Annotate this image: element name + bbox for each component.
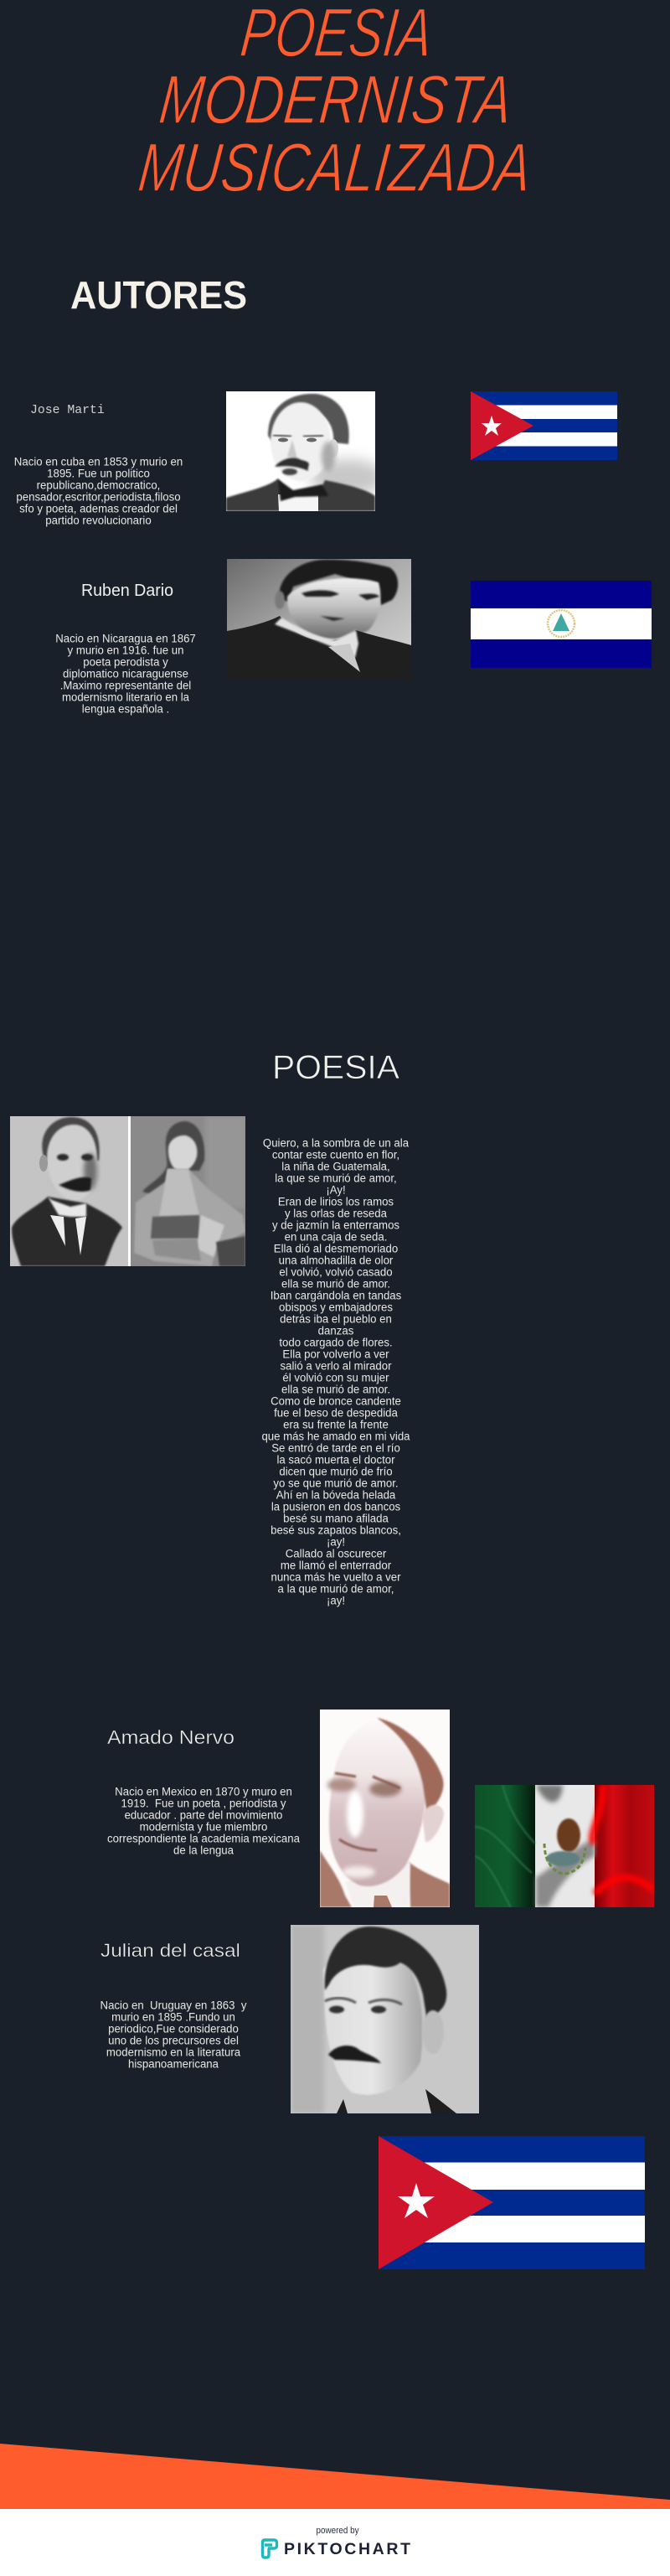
flag: Cuba large [379, 2136, 645, 2269]
text block: Ruben Dario bio: y murio en 1916. fue un [68, 644, 183, 657]
author name: Julian del casal: Julian del casal [100, 1940, 240, 1961]
text block: poem: que más he amado en mi vida [261, 1430, 410, 1443]
text block: poem: a la que murió de amor, [278, 1582, 394, 1596]
text block: Julian del casal bio [100, 1999, 247, 2071]
piktochart wordmark: PIKTOCHART [284, 2540, 410, 2558]
text block: Amado Nervo bio: de la lengua [173, 1844, 234, 1857]
author name: Jose Marti: Jose Marti [30, 404, 105, 417]
text block: Ruben Dario bio: diplomatico nicaraguense [63, 667, 188, 680]
text block: Jose Marti bio: republicano,democratico, [37, 478, 160, 492]
text block: poem: Eran de lirios los ramos [278, 1195, 394, 1208]
text block: Jose Marti bio: Nacio en cuba en 1853 y murio en [14, 455, 183, 468]
footer band [0, 2444, 670, 2509]
text block: poem: el volvió, volvió casado [279, 1265, 393, 1279]
text block: Jose Marti bio [14, 455, 183, 527]
text block: Amado Nervo bio: correspondiente la academia mexicana [107, 1832, 300, 1845]
photo: Amado Nervo [320, 1710, 450, 1907]
text block: poem: en una caja de seda. [285, 1230, 387, 1244]
text block: Julian del casal bio: periodico,Fue considerado [108, 2022, 239, 2035]
text block: Amado Nervo bio: 1919. Fue un poeta , periodista y [121, 1797, 286, 1810]
text block: poem: Iban cargándola en tandas [271, 1289, 401, 1302]
text block: Jose Marti bio: pensador,escritor,periodista,filoso [16, 490, 181, 504]
text block: poem: danzas [318, 1324, 354, 1337]
photo: Ruben Dario [227, 559, 411, 680]
author name: Ruben Dario: Ruben Dario [81, 582, 173, 600]
powered by label: powered by [317, 2526, 359, 2536]
text block: Ruben Dario bio: Nacio en Nicaragua en 1867 [55, 632, 196, 645]
text block: poem: la pusieron en dos bancos [271, 1500, 400, 1513]
photo: Marti portrait [10, 1116, 128, 1266]
text block: Amado Nervo bio: modernista y fue miembro [140, 1820, 267, 1834]
flag: Mexico [475, 1785, 654, 1907]
text block: poem: besé su mano afilada [283, 1512, 389, 1525]
text block: poem: ella se murió de amor. [281, 1277, 390, 1291]
text block: poem: Como de bronce candente [271, 1394, 401, 1408]
text block: poem: la que se murió de amor, [275, 1172, 397, 1185]
text block: poem: obispos y embajadores [279, 1301, 393, 1314]
text block: poem: y las orlas de reseda [285, 1207, 387, 1220]
text block: Amado Nervo bio [107, 1785, 300, 1857]
text block: poem: Callado al oscurecer [286, 1547, 387, 1560]
text block: poem: la niña de Guatemala, [281, 1160, 390, 1173]
text block: poem: Ella dió al desmemoriado [274, 1242, 398, 1255]
text block: poem: Ella por volverlo a ver [282, 1347, 389, 1361]
text block: Julian del casal bio: uno de los precursores del [108, 2034, 239, 2047]
text block: Ruben Dario bio: poeta perodista y [83, 655, 168, 669]
text block: poem: todo cargado de flores. [279, 1336, 393, 1349]
heading: poesia: POESIA [272, 1049, 399, 1086]
text block: Amado Nervo bio: Nacio en Mexico en 1870 y muro en [115, 1785, 292, 1798]
text block: poem: besé sus zapatos blancos, [271, 1523, 401, 1537]
text block: Ruben Dario bio: modernismo literario en la [62, 691, 189, 704]
text block: Julian del casal bio: Nacio en Uruguay en 1863 y [100, 1999, 247, 2012]
text block: poem: Quiero, a la sombra de un ala [263, 1136, 409, 1150]
text block: poem: me llamó el enterrador [281, 1559, 392, 1572]
text block: Jose Marti bio: 1895. Fue un politico [47, 467, 150, 480]
text block: Jose Marti bio: partido revolucionario [45, 514, 152, 527]
text block: poem: dicen que murió de frío [279, 1465, 393, 1478]
heading: autores: AUTORES [70, 273, 247, 317]
text block: poem: yo se que murió de amor. [273, 1477, 399, 1490]
text block: Jose Marti bio: sfo y poeta, ademas creador del [19, 502, 178, 515]
photo: woman portrait [131, 1116, 245, 1266]
text block: Julian del casal bio: modernismo en la literatura [106, 2046, 241, 2059]
title: MUSICALIZADA [135, 130, 535, 206]
text block: poem: y de jazmín la enterramos [272, 1218, 399, 1232]
icon: piktochart logo [263, 2540, 276, 2558]
photo: Julian del casal [291, 1925, 479, 2113]
text block: poem: detrás iba el pueblo en [280, 1312, 392, 1326]
flag: Nicaragua [471, 581, 652, 668]
text block: poem: Se entró de tarde en el río [271, 1441, 400, 1455]
text block: poem: nunca más he vuelto a ver [271, 1570, 401, 1584]
text block: Amado Nervo bio: educador . parte del movimiento [125, 1808, 282, 1822]
text block: poem: él volvió con su mujer [282, 1371, 389, 1384]
author name: Amado Nervo: Amado Nervo [107, 1726, 234, 1748]
text block: poem: ¡ay! [327, 1535, 345, 1549]
text block: Julian del casal bio: hispanoamericana [128, 2057, 219, 2071]
divider [128, 1116, 131, 1266]
flag: Cuba [471, 391, 617, 460]
text block: poem [261, 1136, 410, 1607]
text block: Julian del casal bio: murio en 1895 .Fundo un [111, 2010, 235, 2024]
text block: poem: contar este cuento en flor, [272, 1148, 399, 1161]
text block: Ruben Dario bio: .Maximo representante del [60, 679, 191, 692]
text block: poem: ella se murió de amor. [281, 1383, 390, 1396]
text block: Ruben Dario bio [55, 632, 196, 716]
text block: poem: una almohadilla de olor [279, 1254, 394, 1267]
text block: Ruben Dario bio: lengua española . [82, 702, 169, 716]
photo: Jose Marti [226, 391, 385, 511]
text block: poem: la sacó muerta el doctor [276, 1453, 395, 1466]
text block: poem: fue el beso de despedida [274, 1406, 398, 1420]
title [135, 0, 535, 206]
title: MODERNISTA [156, 62, 516, 138]
footer branding [0, 2509, 670, 2576]
text block: poem: salió a verlo al mirador [281, 1359, 392, 1373]
text block: poem: ¡ay! [327, 1594, 345, 1607]
text block: poem: ¡Ay! [326, 1183, 346, 1197]
text block: poem: era su frente la frente [283, 1418, 389, 1431]
text block: poem: Ahí en la bóveda helada [276, 1488, 396, 1502]
